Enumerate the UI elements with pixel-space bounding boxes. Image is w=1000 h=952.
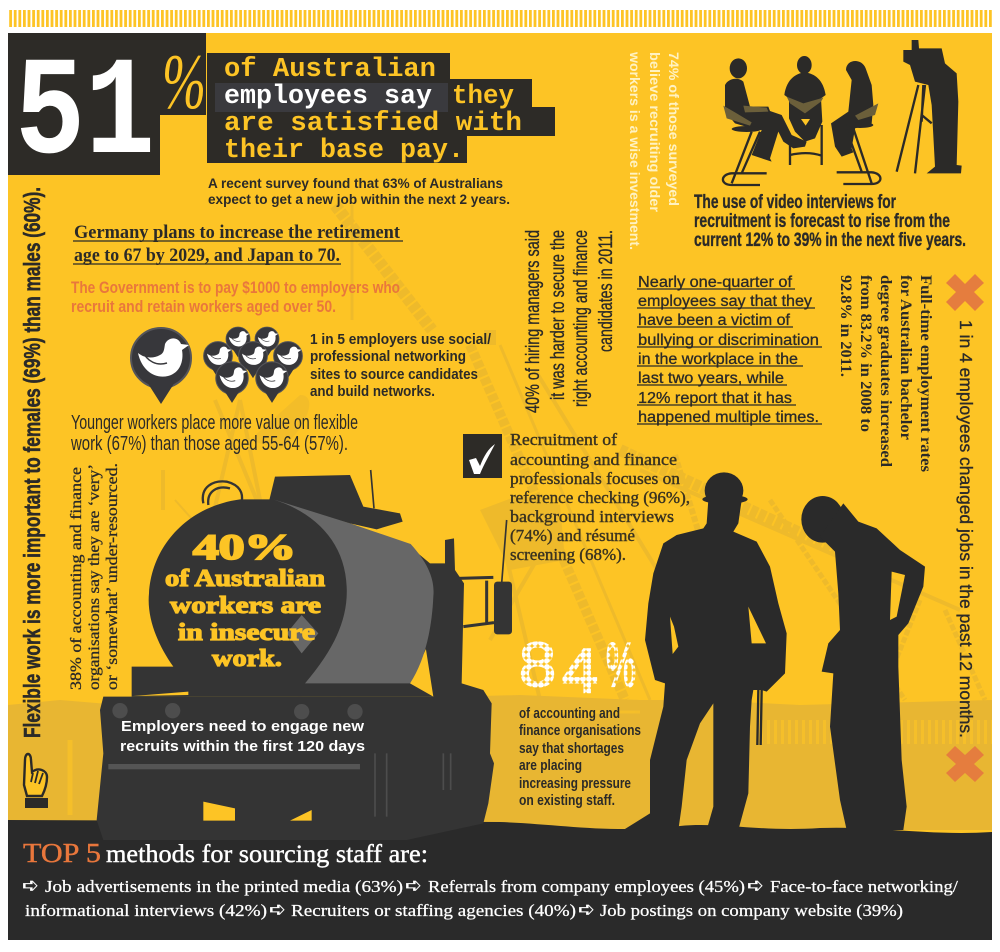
text: recruitment checks: professionals focuses on bbox=[510, 469, 680, 488]
text: bullying underlined: bullying or discrimination bbox=[638, 332, 819, 349]
text: bullying underlined: happened multiple times. bbox=[638, 409, 819, 426]
text: bullying underlined: 12% report that it has bbox=[638, 390, 792, 407]
text: social networking: and build networks. bbox=[310, 383, 435, 400]
text: government payment bbox=[71, 279, 400, 316]
illustration: construction workers bbox=[623, 472, 925, 830]
text: shortages: increasing pressure bbox=[519, 776, 631, 792]
footer list bbox=[22, 873, 958, 921]
text: shortages: of accounting and bbox=[519, 706, 620, 722]
header: 51% block bbox=[8, 33, 206, 195]
right interviewee on stool bbox=[831, 61, 880, 184]
icon: orange cross top bbox=[946, 274, 984, 311]
centre interviewer on chair bbox=[784, 56, 826, 165]
headline backing blocks bbox=[207, 53, 555, 163]
text: recruitment checks: (74%) and résumé bbox=[510, 526, 635, 545]
text: social networking: 1 in 5 employers use social/ bbox=[310, 331, 492, 348]
text: shortages: finance organisations bbox=[519, 723, 641, 739]
text: bullying underlined: have been a victim of bbox=[638, 312, 791, 329]
tank text: workers are bbox=[170, 593, 321, 619]
dark block behind number bbox=[8, 33, 206, 175]
headline text: their base pay. bbox=[224, 136, 464, 166]
tank highlight bbox=[273, 499, 434, 683]
footer list: ➪ bbox=[22, 873, 39, 897]
text: changed jobs vertical: 1 in 4 employees changed jobs in the past 12 months. bbox=[956, 320, 976, 738]
headline text: they bbox=[452, 82, 514, 112]
number 51: 51 bbox=[15, 36, 155, 195]
text: full-time employment vertical bbox=[837, 275, 934, 472]
icon: large bird pin bbox=[131, 328, 191, 404]
footer list: ➪ bbox=[269, 897, 286, 921]
text: bullying underlined: Nearly one-quarter of bbox=[638, 274, 793, 291]
text: under-resourced vertical: organisations say they are ‘very’ bbox=[86, 464, 103, 690]
text: 74% older workers: 74% of those surveyed bbox=[666, 52, 682, 206]
bumper strip bbox=[108, 764, 360, 769]
text: bullying underlined: in the workplace in the bbox=[638, 351, 798, 368]
footer list: Job advertisements in the printed media (63%) bbox=[45, 877, 403, 896]
text: shortages: are placing bbox=[519, 758, 582, 774]
text: government payment: The Government is to pay $1000 to employers who bbox=[71, 279, 400, 297]
statistic: 84% dotted: 4 bbox=[562, 637, 598, 706]
text: recruitment checks: background interviews bbox=[510, 507, 674, 526]
worker standing bbox=[623, 472, 787, 830]
footer heading bbox=[23, 838, 428, 868]
icon: orange cross bottom bbox=[946, 746, 984, 782]
text: recruitment checks: screening (68%). bbox=[510, 545, 626, 564]
footer list: ➪ bbox=[747, 873, 764, 897]
tank text: work. bbox=[212, 646, 282, 672]
perforated top strip bbox=[8, 10, 992, 27]
text: under-resourced vertical: 38% of accounting and finance bbox=[68, 467, 85, 690]
text: Germany retirement age bbox=[73, 223, 403, 266]
tank text: in insecure bbox=[178, 620, 315, 646]
illustration: video interview silhouettes bbox=[723, 40, 962, 185]
cameraman with tripod bbox=[897, 40, 962, 173]
footer list: Referrals from company employees (45%) bbox=[428, 877, 745, 896]
text: hiring managers vertical: 40% of hiring managers said bbox=[523, 230, 544, 413]
headline text bbox=[224, 55, 522, 166]
text: shortages: say that shortages bbox=[519, 741, 624, 757]
headline text: of Australian bbox=[224, 55, 436, 85]
text: full-time employment vertical: 92.8% in 2011. bbox=[837, 275, 854, 377]
text: under-resourced vertical bbox=[68, 463, 121, 690]
footer heading: TOP 5 bbox=[23, 838, 101, 868]
percent sign: % bbox=[162, 38, 206, 125]
text: younger workers: Younger workers place more value on flexible bbox=[71, 412, 358, 434]
footer: top 5 sourcing methods bbox=[22, 838, 958, 921]
statistic: 84% dotted: % bbox=[606, 631, 636, 700]
footer list: Face-to-face networking/ bbox=[770, 877, 958, 896]
footer list: Recruiters or staffing agencies (40%) bbox=[291, 901, 576, 920]
icon: cluster of bird pins bbox=[204, 327, 302, 403]
text: recent survey: expect to get a new job within the next 2 years. bbox=[208, 191, 510, 207]
truck silhouette bbox=[97, 470, 512, 840]
text: recent survey: A recent survey found that 63% of Australians bbox=[208, 175, 503, 191]
worker looking down bbox=[801, 496, 925, 830]
text: 74% older workers bbox=[627, 51, 682, 250]
truck caption bbox=[120, 718, 365, 755]
tank text: 40% bbox=[193, 527, 296, 567]
text: social networking: sites to source candidates bbox=[310, 366, 478, 383]
left interviewee on stool bbox=[723, 58, 807, 185]
text: shortages bbox=[519, 706, 641, 809]
text: recruitment checks bbox=[510, 430, 690, 564]
text: video interviews: The use of video interviews for bbox=[694, 192, 896, 213]
bottom dark band bbox=[8, 820, 992, 940]
text: under-resourced vertical: or ‘somewhat’ under-resourced. bbox=[104, 463, 121, 690]
text: video interviews bbox=[694, 192, 966, 251]
footer list: ➪ bbox=[578, 897, 595, 921]
text: Germany retirement age: Germany plans to increase the retirement bbox=[74, 223, 401, 243]
text: recruitment checks: reference checking (96%), bbox=[510, 488, 690, 507]
background: horizon band bbox=[8, 695, 992, 830]
footer list: Job postings on company website (39%) bbox=[600, 901, 903, 920]
text: 74% older workers: believe recruiting older bbox=[647, 52, 663, 213]
text: shortages: on existing staff. bbox=[519, 793, 615, 809]
text: full-time employment vertical: for Australian bachelor bbox=[897, 275, 914, 440]
background: construction cranes bbox=[163, 205, 985, 700]
truck caption: recruits within the first 120 days bbox=[120, 738, 365, 755]
footer heading: methods for sourcing staff are: bbox=[106, 841, 428, 868]
text: bullying underlined: last two years, while bbox=[638, 370, 784, 387]
lights bbox=[112, 703, 363, 719]
text: Germany retirement age: age to 67 by 2029, and Japan to 70. bbox=[74, 246, 340, 266]
headline text: employees say bbox=[224, 82, 432, 112]
text: social networking: professional networking bbox=[310, 348, 466, 365]
truck caption: Employers need to engage new bbox=[121, 718, 364, 735]
text: hiring managers vertical: candidates in 2011. bbox=[596, 230, 617, 352]
text: flexible work vertical: Flexible work is more important to females (69%) than males (60%). bbox=[19, 187, 45, 738]
text: 74% older workers: workers is a wise investment. bbox=[627, 51, 643, 250]
text: hiring managers vertical: right accounting and finance bbox=[571, 230, 592, 407]
text: social networking bbox=[310, 331, 492, 400]
statistic: 84% dotted bbox=[519, 631, 636, 706]
illustration: tanker truck bbox=[97, 470, 512, 840]
text: full-time employment vertical: Full-time employment rates bbox=[917, 275, 934, 472]
footer list: ➪ bbox=[405, 873, 422, 897]
text: younger workers bbox=[70, 412, 358, 455]
icon: check box bbox=[463, 434, 502, 478]
text: full-time employment vertical: from 83.2% in 2008 to bbox=[857, 275, 874, 432]
tank text: of Australian bbox=[165, 566, 325, 592]
text: hiring managers vertical bbox=[523, 230, 617, 413]
headline text: are satisfied with bbox=[224, 109, 522, 139]
tank valve bbox=[287, 615, 318, 653]
text: bullying underlined bbox=[637, 274, 822, 426]
text: hiring managers vertical: it was harder to secure the bbox=[548, 230, 569, 400]
text: government payment: recruit and retain workers aged over 50. bbox=[71, 298, 336, 316]
text: bullying underlined: employees say that they bbox=[638, 293, 812, 310]
text: recruitment checks: Recruitment of bbox=[510, 430, 618, 449]
text: younger workers: work (67%) than those aged 55-64 (57%). bbox=[70, 433, 348, 455]
footer list: informational interviews (42%) bbox=[25, 901, 267, 920]
text: full-time employment vertical: degree graduates increased bbox=[877, 275, 894, 467]
text: recruitment checks: accounting and finance bbox=[510, 450, 677, 469]
statistic: 84% dotted: 8 bbox=[519, 631, 556, 700]
wheel arches bbox=[203, 802, 312, 821]
headline: satisfied with base pay bbox=[207, 53, 555, 166]
text: recent survey bbox=[208, 175, 510, 207]
tank text bbox=[165, 527, 325, 672]
icon: pointing hand bbox=[24, 754, 48, 808]
